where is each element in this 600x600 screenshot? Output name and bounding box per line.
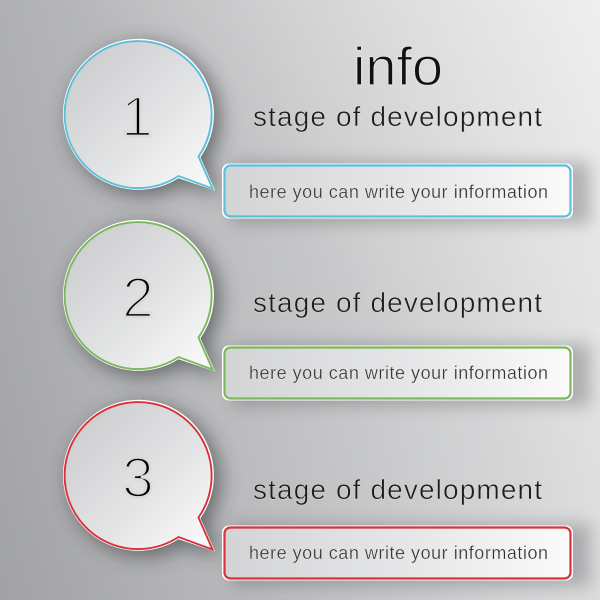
stage 3 text box: [222, 526, 573, 580]
stage 3 box shadow: [232, 524, 590, 586]
stage 3 text box: here you can write your information: [249, 543, 548, 563]
heading: info: info: [353, 37, 443, 97]
stage 2 bubble: [63, 220, 221, 376]
stage 2 heading: stage of development: [253, 287, 542, 318]
stage 1 text box: [222, 164, 573, 218]
stage 3 bubble: [63, 400, 221, 556]
stage 3 bubble: 3: [122, 446, 154, 510]
stage 1 bubble: [63, 39, 221, 196]
stage 2: [63, 220, 590, 406]
stage 3: [63, 400, 590, 586]
stage 2 text box: [222, 346, 573, 400]
stage 1 bubble: 1: [121, 85, 153, 149]
stage 3 heading: stage of development: [253, 474, 542, 505]
stage 1 heading: stage of development: [253, 101, 542, 132]
stage 1: [63, 39, 590, 224]
stage 2 bubble: 2: [122, 266, 154, 330]
stage 2 text box: here you can write your information: [249, 363, 548, 383]
stage 1 text box: here you can write your information: [249, 182, 548, 202]
stage 1 box shadow: [232, 162, 590, 224]
stage 2 box shadow: [232, 344, 590, 406]
